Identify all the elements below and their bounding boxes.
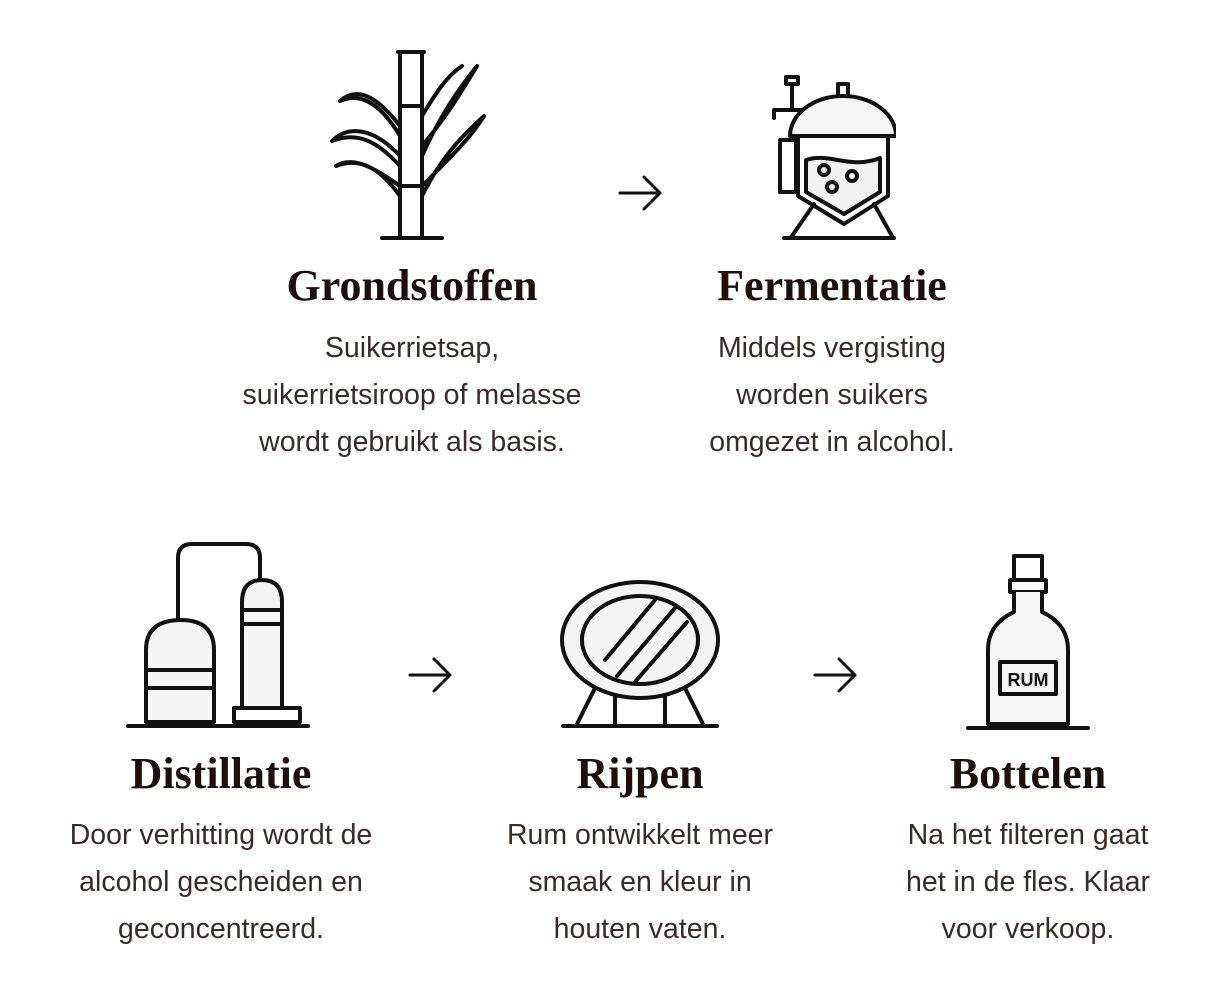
icon: sugarcane	[330, 50, 486, 240]
title: Grondstoffen	[286, 261, 537, 310]
text: Rum ontwikkelt meer	[507, 819, 773, 851]
step: Distillatie	[70, 749, 372, 945]
text: Na het filteren gaat	[908, 819, 1148, 851]
title: Bottelen	[950, 749, 1106, 798]
text: alcohol gescheiden en	[79, 866, 363, 898]
text: Suikerrietsap,	[325, 332, 499, 364]
step: Rijpen	[507, 749, 773, 945]
title: Distillatie	[131, 749, 311, 798]
text: Middels vergisting	[718, 332, 946, 364]
text	[507, 819, 773, 945]
icon: barrel	[560, 580, 720, 728]
text	[709, 332, 955, 458]
step: Fermentatie	[709, 261, 955, 458]
icon: rum bottle	[966, 554, 1090, 730]
title: Rijpen	[576, 749, 704, 798]
icon: rum bottle: RUM	[1008, 670, 1048, 690]
text: geconcentreerd.	[118, 913, 324, 945]
text: wordt gebruikt als basis.	[259, 426, 565, 458]
text: voor verkoop.	[942, 913, 1114, 945]
text: smaak en kleur in	[528, 866, 752, 898]
text: worden suikers	[736, 379, 928, 411]
text	[243, 332, 581, 458]
text: suikerrietsiroop of melasse	[243, 379, 581, 411]
text: het in de fles. Klaar	[906, 866, 1150, 898]
arrow 1	[618, 175, 662, 211]
icon: fermentation tank	[772, 75, 896, 240]
arrow 3	[814, 657, 857, 693]
title: Fermentatie	[717, 261, 947, 310]
text	[70, 819, 372, 945]
text: Door verhitting wordt de	[70, 819, 372, 851]
text	[906, 819, 1150, 945]
text: houten vaten.	[554, 913, 726, 945]
arrow 2	[408, 657, 452, 693]
icon: still	[126, 542, 310, 728]
step: Grondstoffen	[243, 261, 581, 458]
text: omgezet in alcohol.	[709, 426, 955, 458]
step: Bottelen	[906, 749, 1150, 945]
